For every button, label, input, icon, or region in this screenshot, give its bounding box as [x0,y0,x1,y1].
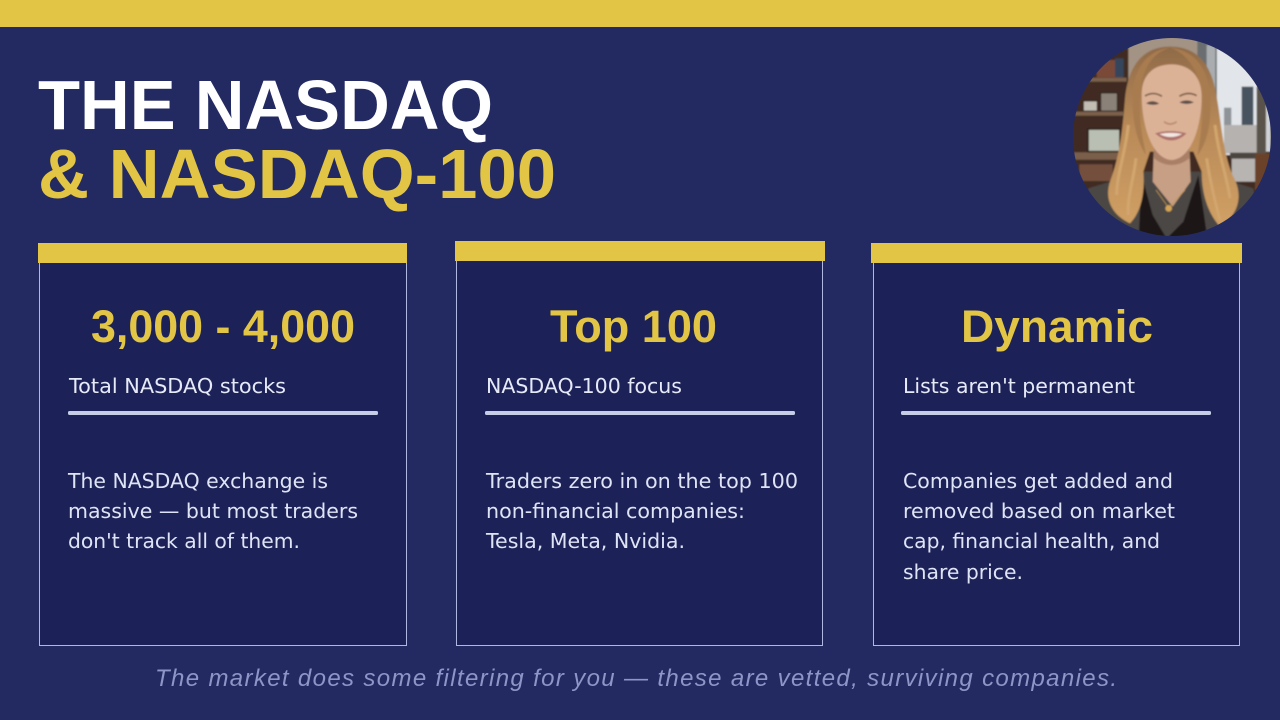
panel: total NASDAQ stocks: Total NASDAQ stocks [68,374,286,398]
panel: total NASDAQ stocks: don't track all of them. [68,529,300,553]
panel: dynamic: cap, financial health, and [903,529,1160,553]
hair front strands [1134,48,1166,153]
panel: dynamic: Dynamic [961,301,1153,352]
title: & NASDAQ-100 [38,135,556,213]
panel: total NASDAQ stocks [38,243,407,646]
features [1145,93,1197,96]
footer takeaway: The market does some filtering for you — these are vetted, surviving companies. [155,665,1117,692]
panel: dynamic: removed based on market [903,499,1175,523]
title [38,66,556,213]
panel: dynamic: Lists aren't permanent [903,374,1135,398]
panel: top 100: non-financial companies: [486,499,745,523]
title: THE NASDAQ [38,66,493,144]
panel: top 100: Tesla, Meta, Nvidia. [485,529,685,553]
panel: top 100 [455,241,825,646]
face [1142,64,1202,160]
panel: total NASDAQ stocks: massive — but most traders [68,499,358,523]
panel: total NASDAQ stocks: 3,000 - 4,000 [91,301,355,352]
neck and chest [1153,145,1191,207]
panel: top 100: Traders zero in on the top 100 [485,469,798,493]
panel: dynamic: Companies get added and [903,469,1173,493]
hair back [1108,47,1239,227]
top accent bar [0,0,1280,27]
necklace [1156,190,1185,208]
body [1088,171,1254,236]
panel: total NASDAQ stocks: The NASDAQ exchange is [67,469,328,493]
panel: top 100: Top 100 [550,301,717,352]
panel: dynamic [871,243,1242,646]
panel: dynamic: share price. [903,560,1023,584]
panel: top 100: NASDAQ-100 focus [486,374,682,398]
presenter portrait [1073,38,1271,236]
